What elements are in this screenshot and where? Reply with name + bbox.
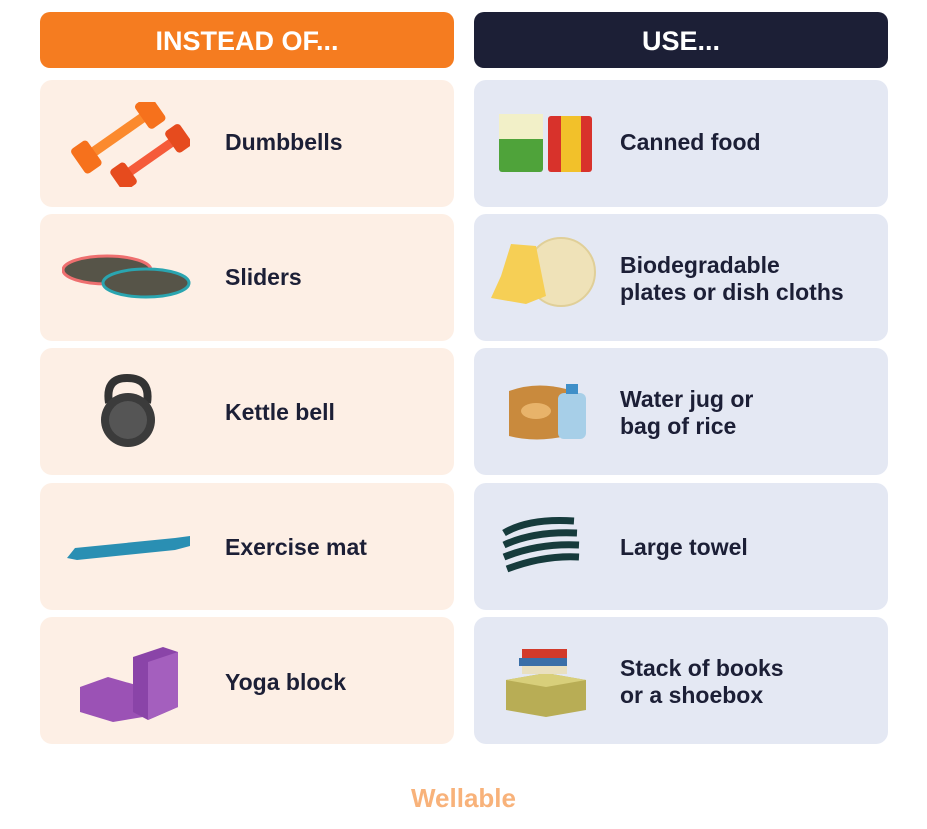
header: instead of [40,12,454,68]
card: water jug [474,348,888,475]
card: yoga block [40,617,454,744]
card: books [474,617,888,744]
icon: plates and cloths [491,237,596,307]
icon: exercise mat [67,536,190,560]
label [620,252,844,305]
label: Large towel [620,534,748,560]
card: plates [474,214,888,341]
label: Exercise mat [225,534,367,560]
label: Dumbbells [225,129,343,155]
card: kettle bell [40,348,454,475]
icon: towel [502,517,580,572]
header: instead of: INSTEAD OF... [155,26,338,56]
label: Water jug or [620,386,753,412]
icon: kettle bell [101,374,155,447]
header: use [474,12,888,68]
card: dumbbells [40,80,454,207]
card: canned food [474,80,888,207]
icon: books and box [506,649,586,717]
logo: Wellable: Wellable [411,783,516,813]
card: sliders [40,214,454,341]
label: Kettle bell [225,399,335,425]
label: plates or dish cloths [620,279,844,305]
label: Canned food [620,129,761,155]
label [620,655,784,708]
icon: sliders [62,254,190,298]
label: Sliders [225,264,302,290]
label: Yoga block [225,669,346,695]
label: Biodegradable [620,252,780,278]
label: Stack of books [620,655,784,681]
label [620,386,753,439]
icon: yoga block [80,647,178,722]
header: use: USE... [642,26,720,56]
icon: rice bag and jug [509,384,586,440]
card: towel [474,483,888,610]
label: or a shoebox [620,682,763,708]
icon: dumbbells [71,102,190,187]
card: exercise mat [40,483,454,610]
label: bag of rice [620,413,736,439]
icon: cans [499,114,592,172]
